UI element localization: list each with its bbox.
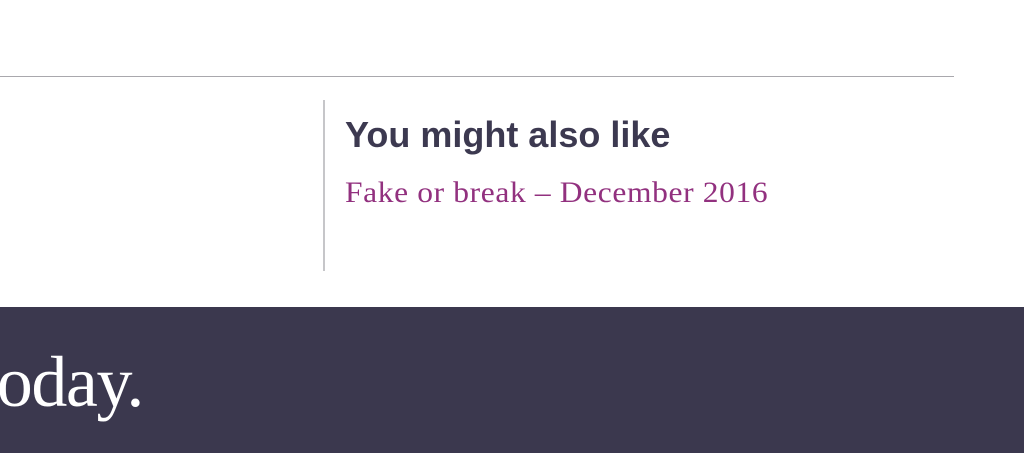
link: Fake or break – December 2016: Fake or break – December 2016	[345, 176, 768, 209]
vertical divider	[323, 100, 325, 271]
top divider line	[0, 76, 954, 77]
heading: You might also like: You might also like	[345, 114, 670, 155]
footer band	[0, 307, 1024, 453]
